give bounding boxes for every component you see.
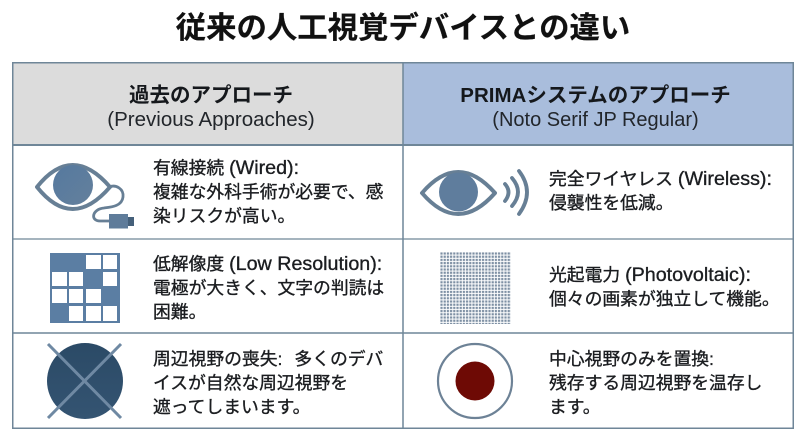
title: 従来の人工視覚デバイスとの違い — [176, 11, 630, 45]
text: central vision only: 残存する周辺視野を温存し — [549, 373, 762, 393]
text: photovoltaic: 光起電力 (Photovoltaic): — [549, 264, 751, 286]
header: PRIMA system approach: PRIMAシステムのアプローチ — [460, 84, 731, 107]
text: loss of peripheral vision: 周辺視野の喪失: 多くのデバ — [153, 349, 383, 369]
text: central vision only: 中心視野のみを置換: — [549, 349, 714, 369]
header: PRIMA system approach — [460, 84, 731, 131]
icon: crossed out circle — [47, 343, 123, 419]
text: central vision only — [549, 349, 762, 417]
text: wired — [153, 157, 383, 226]
text: low resolution: 困難。 — [153, 302, 206, 322]
text: wireless: 侵襲性を低減。 — [549, 193, 673, 213]
header: PRIMA system approach: (Noto Serif JP Regular) — [492, 109, 699, 131]
text: photovoltaic — [549, 264, 780, 309]
text: low resolution — [153, 253, 384, 322]
text: wired: 有線接続 (Wired): — [153, 157, 299, 179]
text: low resolution: 電極が大きく、文字の判読は — [153, 278, 384, 298]
text: loss of peripheral vision: 遮ってしまいます。 — [153, 397, 310, 417]
header: previous approaches — [107, 84, 315, 131]
icon: wired eye — [35, 163, 134, 228]
text: loss of peripheral vision: イスが自然な周辺視野を — [153, 373, 348, 393]
icon: low resolution grid — [50, 253, 120, 323]
text: loss of peripheral vision — [153, 349, 383, 417]
text: wireless — [549, 168, 772, 213]
text: wireless: 完全ワイヤレス (Wireless): — [549, 168, 772, 190]
text: wired: 複雑な外科手術が必要で、感 — [153, 182, 383, 202]
icon: wireless eye — [420, 169, 529, 216]
text: wired: 染リスクが高い。 — [153, 206, 295, 226]
text: central vision only: ます。 — [549, 397, 601, 417]
text: photovoltaic: 個々の画素が独立して機能。 — [549, 289, 780, 309]
header: previous approaches: 過去のアプローチ — [129, 84, 293, 107]
text: low resolution: 低解像度 (Low Resolution): — [153, 253, 382, 275]
icon: central vision target — [436, 342, 514, 420]
icon: photovoltaic dot grid — [440, 252, 511, 324]
header: previous approaches: (Previous Approaches) — [107, 108, 315, 131]
